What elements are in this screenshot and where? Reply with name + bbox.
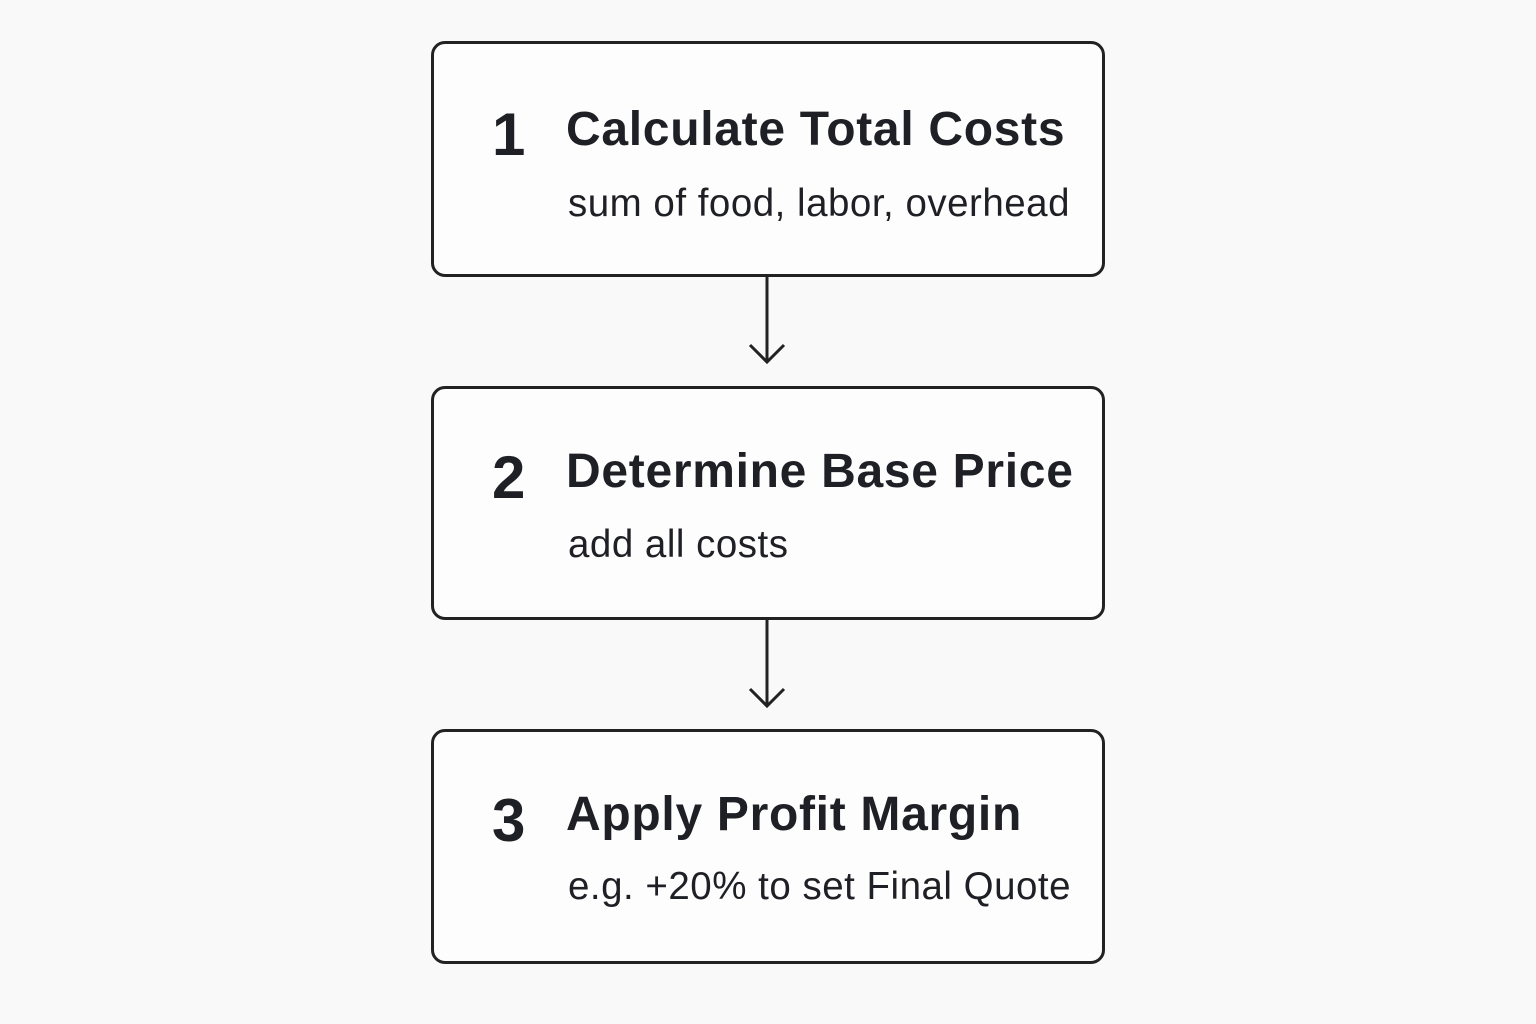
title 3: Apply Profit Margin — [566, 788, 1022, 841]
number 2: 2 — [492, 444, 525, 511]
subtitle 3: e.g. +20% to set Final Quote — [568, 865, 1071, 908]
number 1: 1 — [492, 101, 525, 168]
subtitle 1: sum of food, labor, overhead — [568, 182, 1070, 225]
step 2 box — [431, 386, 1105, 620]
number 3: 3 — [492, 787, 525, 854]
title 1: Calculate Total Costs — [566, 103, 1065, 156]
step 1 box — [431, 41, 1105, 277]
step 3 box — [431, 729, 1105, 964]
subtitle 2: add all costs — [568, 523, 789, 566]
title 2: Determine Base Price — [566, 445, 1074, 498]
